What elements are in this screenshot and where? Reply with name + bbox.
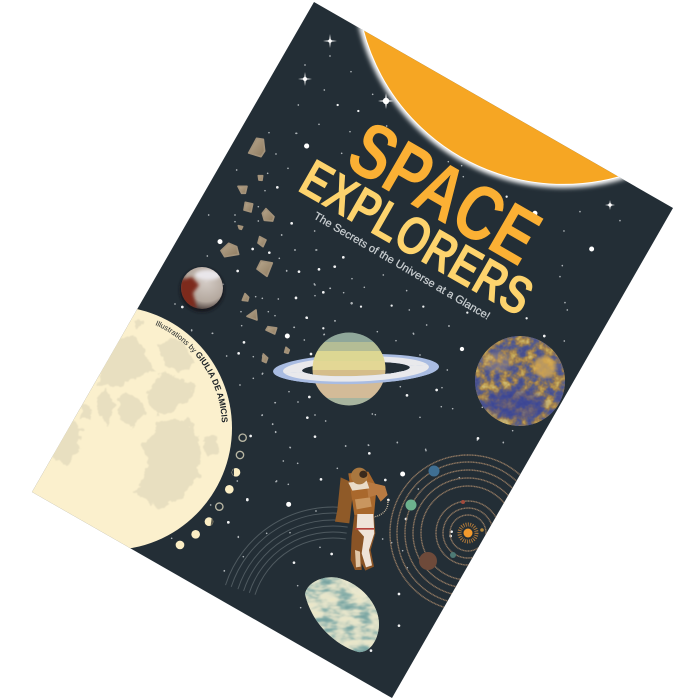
planet: Earth [305, 577, 379, 652]
sun disc [363, 30, 620, 185]
moon [32, 309, 232, 548]
sun glow [354, 26, 627, 192]
asteroid belt [221, 138, 289, 363]
rings in front of planet [274, 364, 439, 384]
starfield [172, 34, 620, 651]
rings behind planet [273, 352, 439, 386]
title line: EXPLORERS: EXPLORERS [290, 148, 543, 328]
orbits [389, 454, 520, 608]
title line: SPACE: SPACE [334, 104, 555, 282]
orbiting planets [428, 466, 440, 476]
moon disc [32, 309, 232, 548]
sun [354, 26, 627, 192]
concentric arcs [226, 507, 351, 595]
planet: Pluto [179, 267, 224, 312]
title [290, 104, 555, 328]
planet: Saturn [273, 330, 439, 410]
subtitle: The Secrets of the Universe at a Glance! [311, 210, 492, 323]
astronaut [335, 468, 388, 571]
planet: Mercury [475, 336, 565, 426]
solar system diagram [389, 454, 520, 608]
lunar maria [52, 321, 218, 509]
illustrator credit: Illustrations by GIULIA DE AMICIS [156, 320, 228, 422]
sparkle stars [298, 34, 615, 210]
sun of solar system [460, 524, 476, 542]
planet bands [312, 332, 386, 406]
moon phases [176, 434, 246, 549]
